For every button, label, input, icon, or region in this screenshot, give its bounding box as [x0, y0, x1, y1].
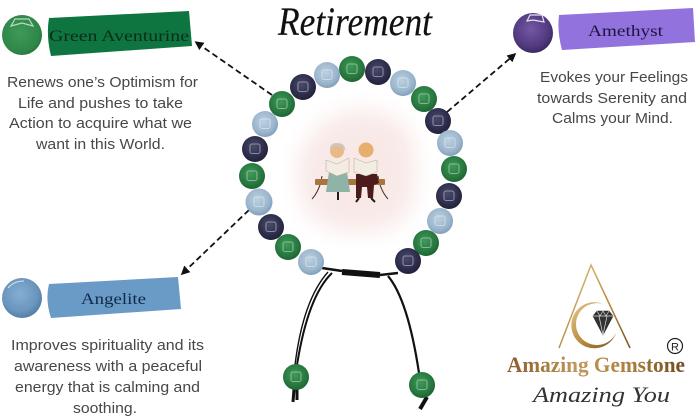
- panel: green aventurine: [2, 11, 198, 153]
- arrow: to amethyst: [447, 55, 514, 112]
- arrow: to angelite: [183, 210, 249, 273]
- text: green aventurine description: Life and pushes to take: [18, 96, 183, 112]
- text: angelite description: Improves spirituality and its: [11, 338, 204, 354]
- cord and knot: [293, 268, 427, 409]
- icon: angelite gem: [2, 278, 42, 318]
- logo: Amazing Gemstone: R: [671, 342, 679, 354]
- label: amethyst: [558, 8, 695, 50]
- label: angelite: Angelite: [81, 291, 146, 308]
- label: green aventurine: Green Aventurine: [49, 28, 189, 45]
- text: amethyst description: towards Serenity and: [537, 91, 687, 107]
- text: amethyst description: [537, 70, 688, 127]
- title: Retirement: [277, 0, 433, 44]
- label: green aventurine: [48, 11, 192, 56]
- label: amethyst: Amethyst: [588, 23, 664, 40]
- logo: Amazing Gemstone: Amazing Gemstone: [507, 352, 685, 377]
- icon: green aventurine gem: [2, 15, 42, 55]
- logo: Amazing Gemstone: [507, 265, 685, 407]
- panel: angelite: [2, 277, 204, 417]
- text: angelite description: energy that is calming and: [15, 380, 200, 396]
- arrow: to green aventurine: [197, 43, 272, 95]
- text: angelite description: awareness with a peaceful: [14, 359, 202, 375]
- text: green aventurine description: Renews one’s Optimism for: [7, 75, 198, 91]
- text: green aventurine description: Action to acquire what we: [9, 116, 192, 132]
- bracelet beads: [239, 56, 467, 398]
- text: angelite description: soothing.: [73, 401, 137, 417]
- logo: Amazing Gemstone: Amazing You: [531, 382, 670, 407]
- icon: amethyst gem: [513, 13, 553, 53]
- text: amethyst description: Calms your Mind.: [552, 111, 673, 127]
- label: angelite: [47, 277, 181, 318]
- text: angelite description: [11, 338, 204, 417]
- panel: amethyst: [513, 8, 695, 127]
- illustration: retired couple on bench: [298, 110, 415, 232]
- text: amethyst description: Evokes your Feelings: [540, 70, 688, 86]
- text: green aventurine description: [7, 75, 198, 153]
- text: green aventurine description: want in this World.: [35, 137, 165, 153]
